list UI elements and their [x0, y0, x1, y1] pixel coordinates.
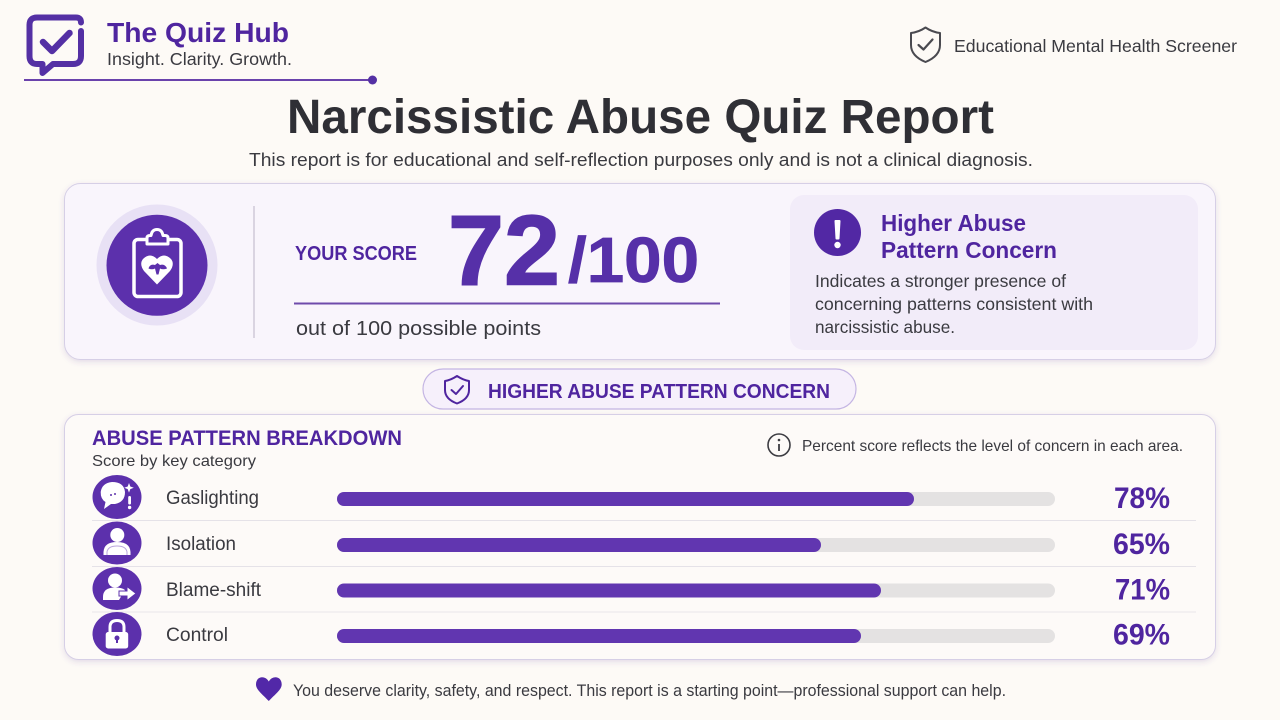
icon: shield check — [911, 28, 940, 62]
screener badge — [911, 28, 1237, 62]
panel: abuse pattern breakdown — [64, 414, 1216, 660]
icon: heart — [256, 677, 282, 701]
label: Gaslighting — [166, 488, 259, 509]
value: 69% — [1113, 618, 1170, 652]
label: Control — [166, 625, 228, 646]
bar — [337, 538, 1055, 552]
breakdown heading: ABUSE PATTERN BREAKDOWN — [92, 427, 402, 450]
info note: Percent score reflects the level of concern in each area. — [802, 438, 1183, 455]
callout body: Indicates a stronger presence of — [815, 271, 1066, 291]
callout heading: Pattern Concern — [881, 237, 1057, 263]
value: 78% — [1114, 482, 1170, 515]
title: Narcissistic Abuse Quiz Report — [287, 91, 994, 144]
icon: shield check — [445, 376, 469, 404]
score maximum: /100 — [568, 224, 699, 296]
icon: speech bubble — [92, 475, 142, 519]
bar — [337, 629, 1055, 643]
panel: score — [64, 184, 1216, 360]
score caption: out of 100 possible points — [296, 318, 541, 340]
icon: chat bubble with check — [30, 18, 81, 73]
screener label: Educational Mental Health Screener — [954, 36, 1237, 56]
score value: 72 — [448, 194, 560, 306]
row: Gaslighting — [92, 475, 1170, 519]
status pill — [423, 369, 856, 409]
footer message — [256, 677, 1006, 701]
tagline: Insight. Clarity. Growth. — [107, 49, 292, 69]
info note — [768, 434, 1183, 456]
value: 65% — [1113, 528, 1170, 561]
footer text: You deserve clarity, safety, and respect. This report is a starting point—professional support can help. — [293, 682, 1006, 700]
value: 71% — [1115, 574, 1170, 606]
bar — [337, 584, 1055, 598]
icon: padlock — [92, 612, 142, 656]
icon: clipboard with heart — [96, 204, 218, 326]
subtitle: This report is for educational and self-reflection purposes only and is not a clinical diagnosis. — [249, 150, 1033, 170]
label: Isolation — [166, 534, 236, 555]
breakdown subheading: Score by key category — [92, 453, 256, 470]
logo: The Quiz Hub — [24, 17, 377, 84]
callout heading: Higher Abuse — [881, 210, 1026, 236]
row: Blame-shift — [92, 567, 1170, 610]
icon: alert — [814, 209, 861, 256]
icon: person with arrow — [92, 567, 142, 610]
pill label: HIGHER ABUSE PATTERN CONCERN — [488, 381, 830, 403]
score label: YOUR SCORE — [295, 243, 417, 265]
callout: concern level — [790, 195, 1198, 350]
icon: person — [92, 522, 142, 564]
row: Isolation — [92, 522, 1170, 564]
row: Control — [92, 612, 1170, 656]
callout body: narcissistic abuse. — [815, 317, 955, 337]
bar — [337, 492, 1055, 506]
label: Blame-shift — [166, 580, 262, 601]
callout body: concerning patterns consistent with — [815, 294, 1093, 314]
brand name: The Quiz Hub — [107, 17, 289, 48]
